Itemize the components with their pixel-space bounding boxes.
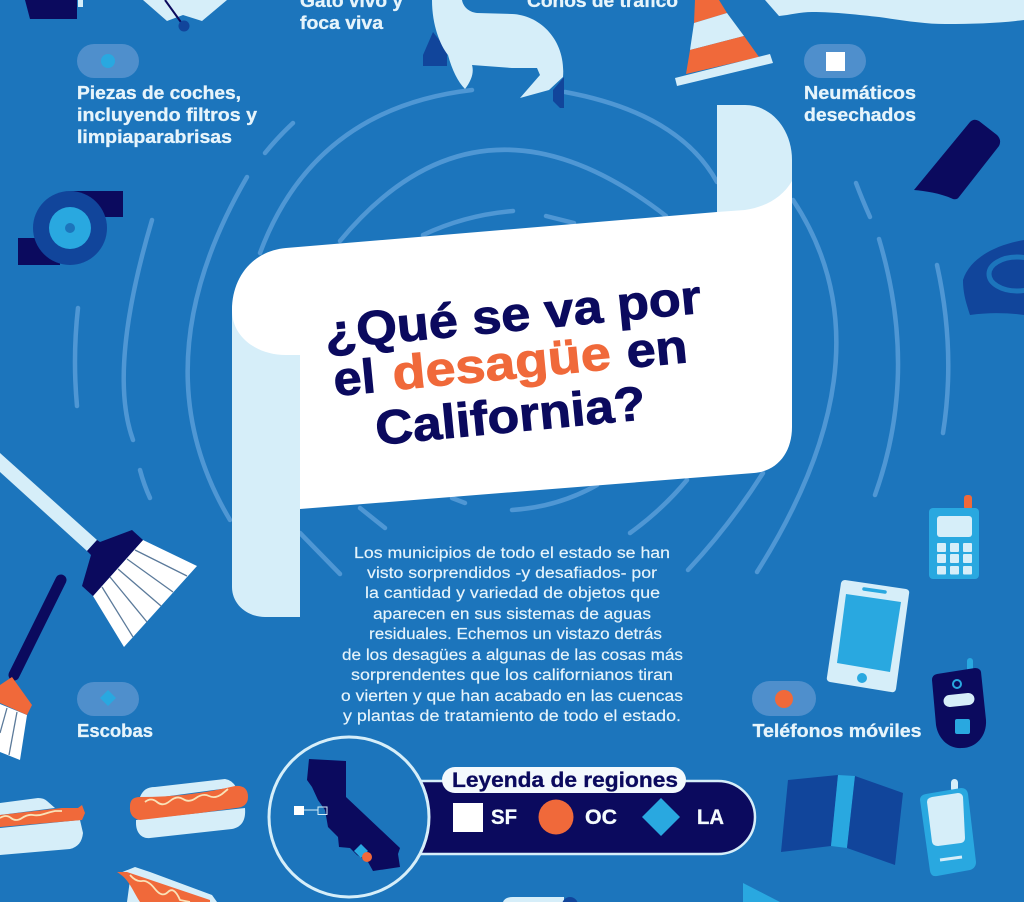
icon: keypad phone (929, 495, 979, 579)
label: live cat and seal: foca viva (300, 13, 384, 33)
icon: turbo filter (18, 191, 123, 265)
icon: smartphone (827, 580, 909, 692)
icon: candybar phone (920, 779, 976, 876)
label: car parts: limpiaparabrisas (77, 127, 232, 147)
legend chip: brooms (77, 682, 139, 716)
icon: small broom (0, 580, 61, 760)
icon: triangle cut off at bottom right (743, 883, 780, 902)
title: desagüe (390, 327, 613, 401)
legend bar: region key: SF (491, 806, 517, 829)
title: el (331, 350, 378, 407)
concentric drain ripple rings (75, 90, 948, 574)
icon: tire section at right edge (963, 240, 1024, 315)
intro text block: residuales. Echemos un vistazo detrás (369, 626, 662, 643)
label: car parts (77, 83, 257, 147)
icon: wavy light shape at top right (765, 0, 1024, 24)
intro text block (341, 545, 683, 725)
icon: open wallet (781, 775, 903, 865)
intro text block: o vierten y que han acabado en las cuencas (341, 688, 683, 705)
map: California locator (269, 737, 429, 897)
panel: title banner (232, 105, 792, 617)
icon: flip phone (932, 658, 986, 748)
title (322, 271, 703, 456)
label: mobile phones: Teléfonos móviles (752, 721, 922, 741)
label: car parts: Piezas de coches, (77, 83, 241, 103)
intro text block: Los municipios de todo el estado se han (354, 545, 670, 562)
icon: car part cut off at top left (25, 0, 83, 19)
icon: traffic cone (675, 0, 773, 86)
legend bar: region key: LA (697, 806, 724, 829)
label: car parts: incluyendo filtros y (77, 105, 257, 125)
legend chip: tires (804, 44, 866, 78)
label: live cat and seal (300, 0, 403, 33)
icon: seal (423, 0, 564, 108)
legend chip: car parts (77, 44, 139, 78)
label: discarded tires: desechados (804, 105, 916, 125)
icon: object cut off at bottom centre (503, 897, 578, 902)
icon: large broom (0, 453, 197, 647)
legend chip: mobile phones (752, 681, 816, 716)
icon: hot dog centre (130, 779, 248, 838)
icon: wiper blade at top (143, 0, 227, 32)
label: discarded tires: Neumáticos (804, 83, 916, 103)
title: en (624, 320, 690, 379)
legend bar: region key (405, 767, 755, 854)
title: California? (373, 377, 648, 456)
legend bar: region key: Leyenda de regiones (452, 769, 678, 792)
label: brooms: Escobas (77, 721, 153, 741)
intro text block: aparecen en sus sistemas de aguas (373, 606, 651, 623)
intro text block: sorprendentes que los californianos tiran (351, 667, 673, 684)
legend bar: region key: OC (585, 806, 617, 829)
icon: tire fragment (914, 120, 1000, 199)
icon: hot dog bottom (117, 867, 217, 902)
intro text block: visto sorprendidos -y desafiados- por (367, 565, 657, 582)
icon: hot dog left (0, 798, 85, 855)
intro text block: la cantidad y variedad de objetos que (365, 585, 660, 602)
title: ¿Qué se va por (322, 271, 703, 360)
label: discarded tires (804, 83, 916, 125)
intro text block: y plantas de tratamiento de todo el estado. (343, 708, 681, 725)
intro text block: de los desagües a algunas de las cosas más (342, 647, 683, 664)
